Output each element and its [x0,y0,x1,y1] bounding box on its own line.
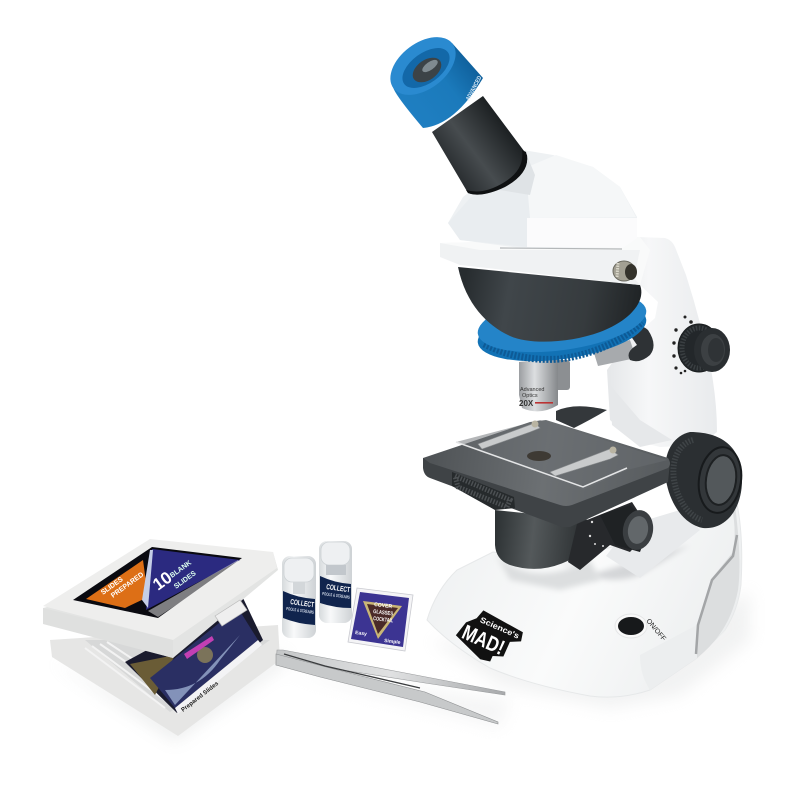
cover glass card: COVER [374,602,392,610]
focus dots [672,316,693,374]
arm [607,237,717,447]
on/off label: ON/OFF [644,618,667,643]
science mad logo: MAD! [458,621,508,660]
blue eyecup [380,25,484,128]
cover glass card: Easy [355,630,367,637]
vial 2 [319,541,352,623]
objective lens [519,358,558,411]
cover glass card [348,588,413,651]
lid label: SLIDES [100,576,125,597]
head [448,150,637,249]
lid label: 10 [149,568,176,594]
lid top [43,539,277,640]
lid label: PREPARED [110,571,145,600]
head plate [440,237,650,285]
stage plate [423,420,670,527]
vial 1: POOLS & STREAMS [286,606,314,615]
science mad logo [451,604,526,671]
stage dial [452,472,515,510]
vial 1: COLLECT [290,597,315,609]
condenser cylinder [495,510,590,569]
eyepiece tube [432,96,527,195]
box ribs [85,642,184,708]
slides [125,598,263,714]
objective lens: Advanced [520,387,544,393]
large focus knob [665,432,745,528]
objective lens: Optics [522,393,538,399]
lid front [43,552,278,658]
blue eyecup: ADVANCED [465,75,484,102]
cover glass card: COCKTAIL [373,616,394,624]
small focus knob [678,324,730,372]
cover glass card: Simple [384,638,401,646]
ground shadows [50,590,750,742]
specimen hole [527,451,551,461]
lid label: SLIDES [173,570,198,591]
brass screw [613,261,637,281]
stage clip arm behind [556,406,607,428]
stage clips [478,423,540,449]
objective lens: 20X [519,399,534,408]
tweezers [276,650,505,724]
pillar block [606,510,700,578]
power button [615,614,647,638]
cover glass card: GLASSES [373,609,394,617]
vial 2: COLLECT [326,582,351,594]
slide box [43,539,280,736]
box bottom [50,625,280,736]
vial 1 [282,556,316,638]
rear objectives [553,326,654,390]
lid label [73,547,242,618]
science mad logo: Science's [479,615,521,641]
microscope [380,25,745,697]
lower focus knob [568,502,656,570]
eyepiece [380,25,527,195]
base [427,492,742,697]
revolving blue ring [474,282,650,371]
box clasp [215,600,247,626]
slides: Prepared Slides [181,681,220,714]
lid label: BLANK [169,560,193,580]
dark bowl [458,267,641,342]
vial 2: POOLS & STREAMS [322,591,350,600]
stage assembly [423,420,745,570]
